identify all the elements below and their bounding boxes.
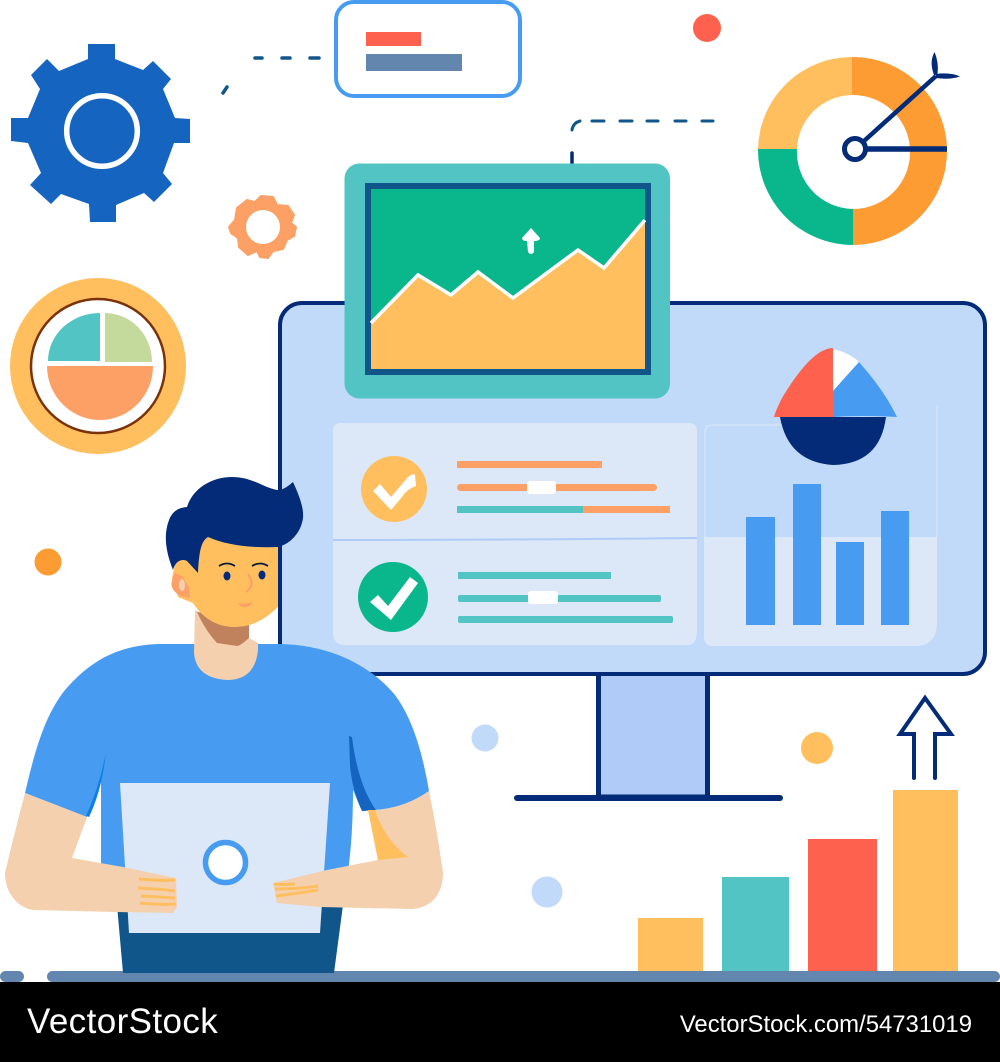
image url: VectorStock.com/54731019 bbox=[680, 1011, 972, 1038]
icon: small up arrow bbox=[522, 228, 540, 254]
decorative dots bbox=[34, 548, 833, 908]
chart: donut gauge bbox=[758, 52, 960, 245]
person bbox=[5, 477, 443, 973]
monitor bbox=[280, 164, 985, 798]
panel: area chart bbox=[344, 164, 670, 398]
panel: status list bbox=[333, 423, 697, 645]
neck shadow bbox=[197, 612, 249, 646]
ear bbox=[171, 573, 190, 598]
icon: large blue gear bbox=[11, 44, 190, 222]
trousers bbox=[117, 905, 343, 973]
face bbox=[172, 536, 278, 627]
monitor stand bbox=[517, 672, 780, 798]
inner arm shade bbox=[368, 810, 408, 860]
status row two bbox=[358, 562, 673, 632]
tablet bbox=[120, 783, 330, 933]
facial features bbox=[219, 564, 268, 607]
chart: round pie badge bbox=[10, 278, 186, 454]
decorative dot: red bbox=[693, 14, 721, 42]
arrow: outlined up arrow bbox=[900, 698, 951, 778]
shirt folds bbox=[86, 736, 376, 817]
brand name: VectorStock bbox=[27, 1002, 218, 1041]
gauge needle bbox=[844, 52, 960, 160]
neck bbox=[194, 610, 258, 680]
connector: dashed line to chart bbox=[572, 121, 713, 168]
chart: exploded pie bbox=[774, 348, 897, 465]
fingers: left hand bbox=[138, 879, 176, 904]
connector: dashed line to card bbox=[223, 58, 319, 93]
monitor screen bbox=[280, 303, 985, 674]
bar chart: growth bars bbox=[638, 790, 958, 974]
shirt bbox=[25, 644, 429, 872]
footer bar: VectorStock credit bbox=[0, 982, 1000, 1062]
fingers: right hand bbox=[274, 884, 318, 896]
status row one bbox=[361, 456, 670, 522]
card: top legend card bbox=[336, 2, 520, 96]
hair bbox=[166, 477, 303, 573]
arm: left bbox=[5, 793, 177, 913]
panel: bar chart bbox=[704, 405, 937, 646]
icon: small orange gear bbox=[229, 196, 296, 258]
desk line bbox=[0, 971, 1000, 982]
arm: right bbox=[273, 791, 443, 909]
